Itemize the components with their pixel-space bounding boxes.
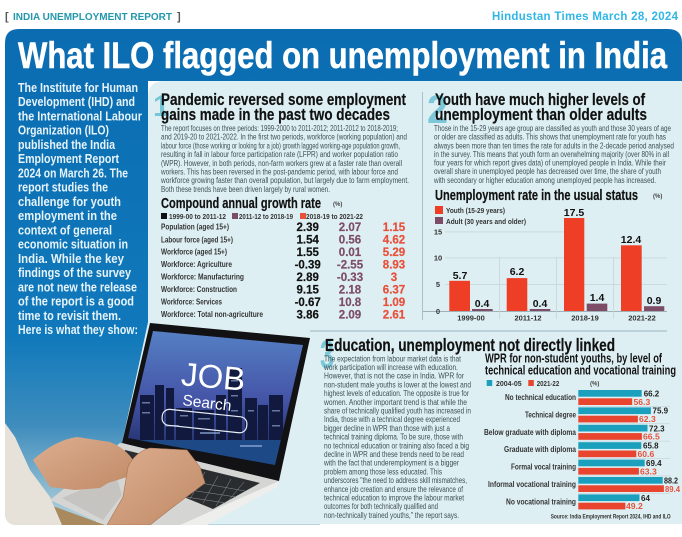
row values: 62.3 [639, 414, 656, 424]
intro text: The Institute for Human [18, 80, 138, 95]
row labels: Informal vocational training [488, 479, 576, 489]
row labels: Graduate with diploma [504, 444, 576, 454]
intro text: Employment Report [18, 151, 120, 166]
CAGR table: (%) [333, 202, 342, 208]
city skyline [139, 368, 283, 465]
table legend: 2011-12 to 2018-19 [239, 212, 293, 221]
section 3 body text: no technical education or training also faced a big [324, 441, 469, 450]
table rows: Workforce: Total non-agriculture [161, 309, 263, 319]
section 1 body text: and 2019-20 to 2021-2022. In the first two periods, workforce (working population) and [161, 133, 407, 142]
intro text: published the India [18, 137, 116, 152]
table rows: 2.09 [339, 310, 361, 322]
intro text: context of general [18, 222, 112, 237]
bar values: 1.4 [590, 292, 604, 304]
table rows: Workforce: Services [161, 297, 222, 307]
JOB text: JOB [180, 355, 247, 398]
bar values: 5.7 [453, 270, 467, 282]
table rows: Population (aged 15+) [161, 222, 229, 232]
intro text: of the report is a good [18, 294, 134, 309]
table rows: 6.37 [383, 284, 405, 296]
section 1: pandemic reversed gains [153, 90, 409, 322]
keyboard [118, 450, 260, 509]
row values: 72.3 [649, 424, 665, 433]
section 3 body text: women. Another important trend is that while the [323, 398, 467, 407]
section 3 body text: decline in WPR and these trends need to be read [324, 450, 464, 459]
row labels: No vocational training [506, 496, 576, 506]
section 3 body text [323, 354, 471, 520]
row labels [484, 392, 576, 506]
category labels [457, 314, 656, 322]
row rules [578, 406, 670, 494]
bar chart: unemployment rate [423, 188, 667, 322]
row values: 60.6 [638, 449, 654, 459]
section 3 body text: technical training diploma. To be sure, those with [324, 433, 463, 442]
Search text: Search [182, 392, 232, 415]
right hand [107, 448, 205, 525]
section 1 body text: resulting in fall in labour force participation rate (LFPR) and worker population ratio [161, 150, 398, 159]
intro text: time to revisit them. [18, 308, 121, 323]
category labels: 2021-22 [628, 314, 656, 322]
section 3 body text: India, those with a technical degree experienced [324, 415, 460, 424]
intro text: are not new the release [18, 279, 137, 294]
WPR legend: 2004-05 [496, 379, 522, 388]
desk wedge [54, 506, 104, 525]
row labels: Below graduate with diploma [484, 427, 576, 437]
WPR legend: 2021-22 [537, 379, 559, 388]
section 1 heading [161, 91, 406, 124]
bar values: 17.5 [564, 207, 584, 219]
WPR legend [487, 379, 599, 388]
left hand [33, 437, 133, 490]
section 3 body text: enhance job creation and ensure the relevance of [324, 485, 464, 494]
section 2: youth unemployment [423, 88, 674, 322]
table rows: -0.33 [337, 272, 363, 284]
section 2 heading: unemployment than older adults [435, 106, 647, 124]
intro text: economic situation in [18, 237, 128, 252]
category labels: 2018-19 [571, 314, 599, 322]
table rows: Workforce: Manufacturing [161, 272, 244, 282]
section 1 body text [160, 124, 409, 194]
table rows: 1.15 [383, 222, 406, 234]
intro text: Development (IHD) and [18, 94, 135, 109]
bar values: 0.9 [647, 295, 661, 307]
table legend: 1999-00 to 2011-12 [169, 212, 226, 221]
section 3 body text: share of technically qualified youth has increased in [324, 406, 471, 416]
row labels: Technical degree [525, 409, 576, 419]
table rows: -2.55 [337, 260, 364, 272]
laptop front highlight [180, 481, 279, 525]
bar values: 0.4 [533, 298, 547, 310]
laptop base [50, 443, 279, 525]
WPR chart heading [485, 352, 676, 378]
table rows: 3 [391, 272, 397, 284]
section 3 body text: with the fact that underemployment is a bigger [323, 459, 459, 468]
row labels: No technical education [505, 392, 576, 402]
gridlines and axis: 10 [434, 254, 442, 262]
2004-05 bars [578, 390, 663, 501]
section 1 heading: gains made in the past two decades [161, 106, 390, 124]
table rows: -0.67 [295, 297, 321, 309]
section 1 body text: workers. This has been reversed in the post-pandemic period, with labour force and [160, 168, 398, 176]
CAGR table [161, 196, 406, 322]
row values: 89.4 [665, 484, 680, 494]
table rows: 1.54 [297, 234, 319, 246]
WPR legend: (%) [590, 382, 599, 388]
table heading: Compound annual growth rate [161, 196, 321, 212]
table rows: 9.15 [297, 284, 319, 296]
search box [161, 409, 248, 433]
section 3 body text: non-technically trained youths," the report says. [324, 511, 459, 520]
table rows [161, 222, 406, 322]
intro text: challenge for youth [18, 194, 121, 209]
bar values: 12.4 [621, 234, 641, 246]
section 2 body text [433, 124, 674, 185]
bar chart: WPR by level of training [484, 352, 680, 520]
row values: 56.3 [634, 397, 650, 407]
section 1 body text: workforce growing faster than overall population, but largely due to farm employment. [160, 176, 409, 185]
intro text: report studies the [18, 180, 108, 195]
table rows: 2.89 [297, 272, 319, 284]
section 1 body text: Both these trends have been driven largely by rural women. [161, 185, 330, 194]
row values: 65.8 [643, 442, 659, 451]
chart legend: Adult (30 years and older) [446, 217, 526, 226]
category labels: 2011-12 [514, 314, 542, 322]
section number 2: 2 [427, 88, 448, 132]
section 3: education and unemployment [320, 333, 680, 520]
row values: 88.2 [664, 476, 678, 486]
section 1 heading: Pandemic reversed some employment [161, 91, 406, 109]
2021-22 bars [578, 398, 664, 509]
intro text: 2024 on March 26. The [18, 165, 128, 180]
section 3 body text: technical education to improve the labour market [324, 494, 465, 502]
chart legend: Youth (15-29 years) [446, 206, 505, 215]
row values [626, 390, 680, 511]
gridlines and axis: 0 [436, 307, 440, 316]
section 3 body text: non-student male youths is lower at the lowest and [324, 380, 471, 389]
bar values [453, 207, 661, 310]
table rows: 0.56 [339, 234, 361, 246]
intro text: India. While the key [18, 251, 125, 266]
chart legend [435, 206, 526, 226]
table rows: 2.07 [339, 222, 361, 234]
section 3 body text: highest levels of education. The opposite is true for [324, 389, 469, 398]
row values: 66.5 [643, 432, 660, 442]
divider between sections [422, 92, 423, 320]
trackpad [62, 480, 122, 520]
intro text: employment in the [18, 208, 117, 223]
section 3 body text: problem among those less educated. This [324, 467, 442, 476]
table rows: 0.01 [339, 247, 362, 259]
header label: India Unemployment Report: INDIA UNEMPLOYMENT REPORT [13, 11, 173, 23]
table legend [161, 212, 363, 221]
table rows: 2.18 [339, 284, 362, 296]
youth bars [449, 218, 642, 311]
table rows: 1.09 [383, 297, 405, 309]
laptop lid bezel [122, 323, 310, 481]
table rows: 2.61 [383, 310, 406, 322]
header label: India Unemployment Report: ] [177, 11, 181, 23]
photo: hands on laptop with job search screen [5, 323, 310, 525]
gridlines and axis [423, 228, 667, 319]
table rows: Labour force (aged 15+) [161, 234, 233, 244]
intro text [18, 80, 142, 337]
row values: 69.4 [646, 459, 662, 468]
table rows: 5.29 [383, 247, 405, 259]
table rows: 10.8 [339, 297, 362, 309]
header label: India Unemployment Report: [ [5, 11, 9, 23]
table rows: Workforce: Construction [161, 284, 237, 294]
intro text: Here is what they show: [18, 322, 138, 337]
intro text: the International Labour [18, 108, 142, 124]
table rows: Workforce: Agriculture [161, 259, 232, 269]
section number 1: 1 [153, 90, 170, 123]
row values: 49.2 [626, 501, 643, 511]
table rows: -0.39 [295, 260, 321, 272]
row values: 64 [641, 494, 650, 503]
gridlines and axis: 15 [434, 228, 442, 236]
section 1 body text: The report focuses on three periods: 1999-2000 to 2011-2012; 2011-2012 to 2018-2019; [161, 124, 398, 133]
section 3 body text: However, that is not the case in India. WPR for [324, 372, 464, 381]
sleeve [5, 423, 62, 525]
intro text: findings of the survey [18, 265, 132, 280]
table rows: 1.55 [297, 247, 319, 259]
row values: 63.3 [640, 466, 657, 476]
bar values: 6.2 [510, 266, 524, 278]
table rows: 4.62 [383, 234, 405, 246]
section 3 body text: The expectation from labour market data is that [324, 354, 462, 363]
table rows: Workforce (aged 15+) [161, 247, 227, 257]
bar chart: unemployment rate: (%) [653, 194, 662, 200]
light content panel [95, 81, 682, 524]
category labels: 1999-00 [457, 314, 485, 322]
table rows: 2.39 [297, 222, 319, 234]
table rows: 8.93 [383, 260, 405, 272]
row values: 66.2 [644, 390, 660, 398]
row values: 75.9 [652, 406, 669, 416]
section 2 heading [435, 91, 647, 124]
adult bars [472, 304, 664, 311]
laptop screen [128, 331, 303, 470]
section 3 body text: outcomes for both technically qualified and [324, 502, 438, 511]
table rows: 3.86 [297, 310, 319, 322]
section 3 body text: work participation will increase with education. [323, 363, 458, 372]
source and date line: Hindustan Times March 28, 2024 [492, 11, 679, 23]
section 1 body text: labour force (those working or looking for a job) growth lagged working-age population growth, [161, 141, 400, 150]
gridlines and axis: 5 [436, 280, 440, 289]
row labels: Formal vocal training [511, 462, 576, 472]
table legend: 2018-19 to 2021-22 [306, 212, 363, 221]
intro text: Organization (ILO) [18, 123, 109, 138]
section 3 body text: bigger decline in WPR than those with just a [324, 424, 450, 433]
section 3 body text: underscores "the need to address skill mismatches, [324, 476, 467, 485]
section number 3: 3 [320, 333, 334, 377]
bar values: 0.4 [475, 298, 489, 310]
section 1 body text: (WPR). However, in both periods, non-farm workers grew at a faster rate than overall [161, 159, 402, 168]
